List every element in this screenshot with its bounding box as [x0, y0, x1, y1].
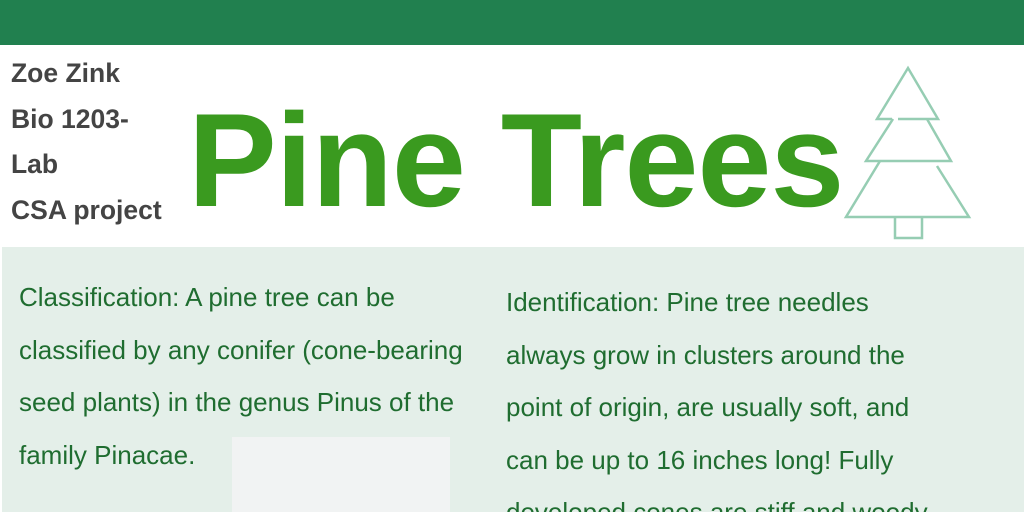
text block: identification: can be up to 16 inches long! Fully	[506, 444, 893, 474]
text block: identification: always grow in clusters around the	[506, 340, 905, 370]
text block: classification	[19, 282, 463, 470]
author block: Bio 1203-	[11, 104, 129, 134]
author block	[11, 58, 162, 224]
text block: classification: Classification: A pine tree can be	[19, 282, 395, 312]
text block: identification: point of origin, are usually soft, and	[506, 392, 909, 422]
title: Pine Trees	[188, 87, 843, 235]
image placeholder	[232, 437, 450, 512]
text block: classification: seed plants) in the genus Pinus of the	[19, 387, 454, 417]
panel: content background	[2, 247, 1024, 512]
text block: classification: classified by any conifer (cone-bearing	[19, 334, 463, 364]
icon: pine tree	[844, 66, 972, 240]
author block: CSA project	[11, 194, 162, 224]
text block: identification: Identification: Pine tree needles	[506, 287, 869, 317]
text block: identification	[506, 287, 933, 512]
top bar	[0, 0, 1024, 45]
author block: Zoe Zink	[11, 58, 120, 88]
author block: Lab	[11, 149, 58, 179]
text block: classification: family Pinacae.	[19, 440, 195, 470]
